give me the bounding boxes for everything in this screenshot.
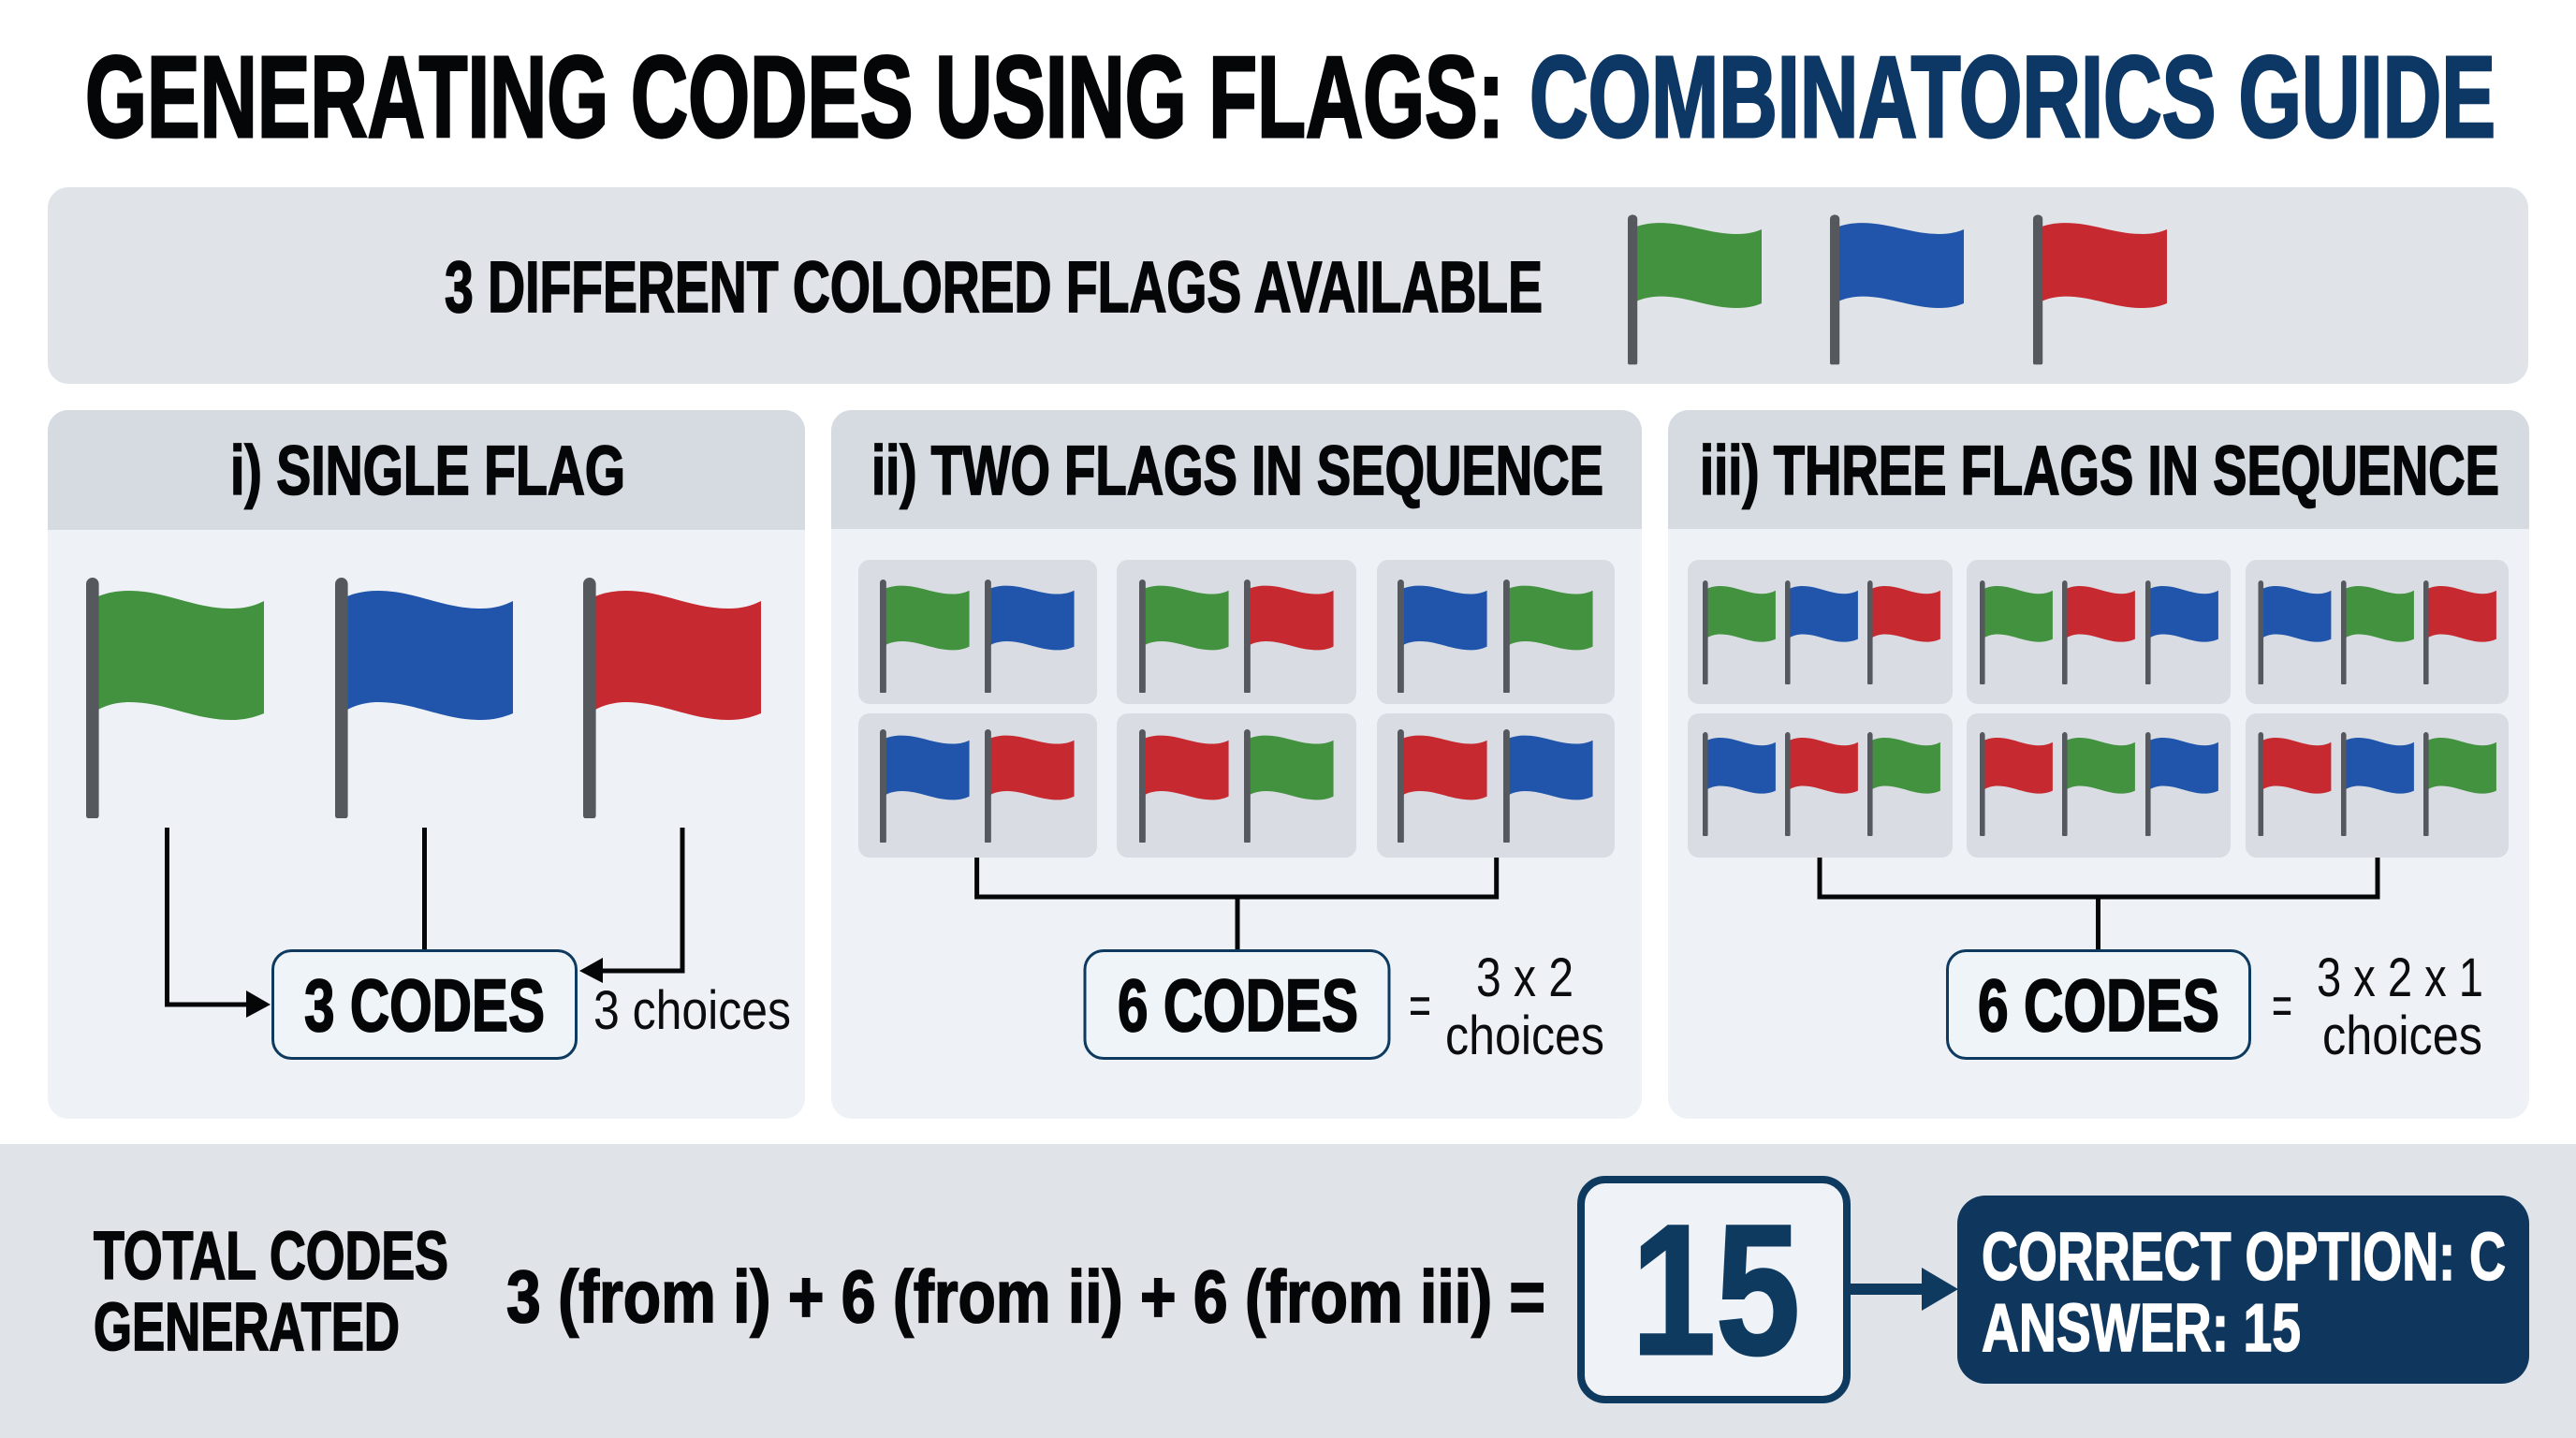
arrow: right flag to codes box	[579, 828, 682, 983]
label: total codes generated	[94, 1219, 448, 1365]
card: green red	[1117, 560, 1356, 704]
card: red green	[1117, 713, 1356, 858]
card: red green blue	[1967, 713, 2231, 858]
connector: middle flag to codes box	[422, 828, 427, 950]
panel: available flags	[48, 187, 2528, 384]
panel: single flag	[48, 410, 805, 1119]
equation: 3 (from i) + 6 (from ii) + 6 (from iii) =	[506, 1255, 1545, 1338]
icon: red flag	[583, 578, 761, 818]
formula: 3 x 2 x 1 choices: choices	[2322, 1005, 2482, 1066]
formula: 3 x 2 x 1 choices: =	[2272, 976, 2292, 1036]
arrow: left flag to codes box	[167, 828, 271, 1018]
result box: 6 codes: 6 CODES	[1978, 963, 2219, 1047]
icon: red flag	[2033, 214, 2167, 364]
arrow: result to answer	[1850, 1268, 1958, 1311]
formula: 3 x 2 choices	[1409, 947, 1604, 1066]
card: red blue green	[2246, 713, 2509, 858]
answer box	[1957, 1196, 2529, 1384]
panel header: single flag: i) SINGLE FLAG	[230, 432, 625, 509]
formula: 3 x 2 choices: 3 x 2	[1476, 947, 1573, 1008]
bracket connector: two flags	[977, 858, 1497, 950]
card: green red blue	[1967, 560, 2231, 704]
panel header: two flags	[831, 410, 1642, 529]
label: total codes generated: TOTAL CODES	[94, 1219, 448, 1294]
bracket connector: three flags	[1820, 858, 2378, 950]
formula: 3 x 2 x 1 choices	[2272, 947, 2483, 1066]
card: blue red green	[1688, 713, 1953, 858]
formula: 3 x 2 choices: =	[1409, 976, 1431, 1036]
title: GENERATING CODES USING FLAGS:	[85, 34, 1504, 162]
heading: available flags: 3 DIFFERENT COLORED FLAGS AVAILABLE	[445, 247, 1543, 328]
panel header: two flags: ii) TWO FLAGS IN SEQUENCE	[871, 432, 1603, 509]
result box: 15: 15	[1632, 1186, 1800, 1393]
text: 3 choices: 3 choices	[593, 980, 791, 1041]
result box: 3 codes: 3 CODES	[304, 963, 545, 1047]
formula: 3 x 2 choices: choices	[1445, 1005, 1604, 1066]
card: green blue red	[1688, 560, 1953, 704]
card: blue red	[858, 713, 1097, 858]
panel: two flags in sequence	[831, 410, 1642, 1119]
result box: 6 codes	[1085, 951, 1389, 1058]
result box: 3 codes	[273, 951, 577, 1058]
result box: 6 codes: 6 CODES	[1118, 963, 1358, 1047]
answer box: ANSWER: 15	[1982, 1291, 2301, 1366]
card: green blue	[858, 560, 1097, 704]
formula: 3 x 2 x 1 choices: 3 x 2 x 1	[2317, 947, 2483, 1008]
panel header: three flags	[1668, 410, 2529, 529]
card: blue green	[1377, 560, 1615, 704]
label: total codes generated: GENERATED	[94, 1290, 400, 1365]
result box: 6 codes	[1947, 951, 2250, 1058]
icon: green flag	[86, 578, 264, 818]
panel header: single flag	[48, 410, 805, 530]
card: blue green red	[2246, 560, 2509, 704]
panel: total codes footer	[0, 1144, 2576, 1438]
icon: green flag	[1628, 214, 1762, 364]
icon: blue flag	[335, 578, 513, 818]
icon: blue flag	[1830, 214, 1964, 364]
card: red blue	[1377, 713, 1615, 858]
panel: three flags in sequence	[1668, 410, 2529, 1119]
